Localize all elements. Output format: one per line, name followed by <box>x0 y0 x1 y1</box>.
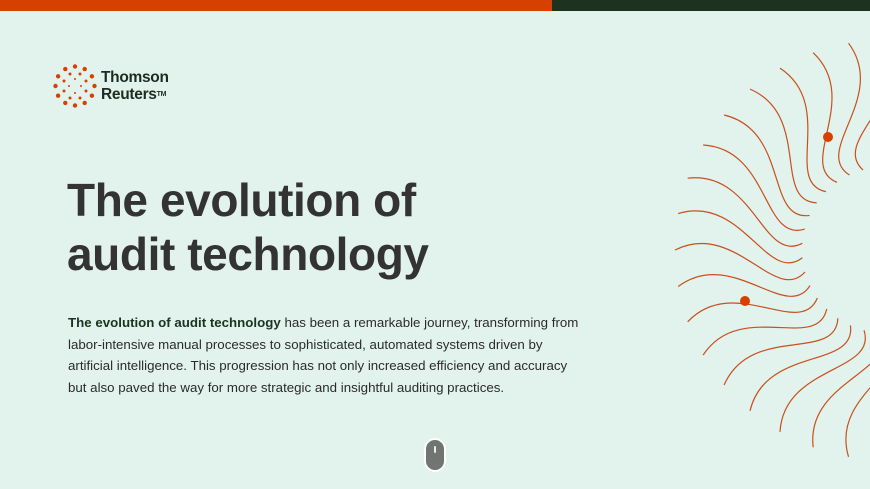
title: audit technology <box>67 228 429 280</box>
logo <box>53 64 169 108</box>
logo text: ReutersTM <box>101 86 166 103</box>
icon: mouse scroll <box>424 438 446 472</box>
title <box>67 174 429 280</box>
intro paragraph: The evolution of audit technology has been a remarkable journey, transforming from labor-intensive manual processes to sophisticated, automated systems driven by artificial intelligence. This progression has not only increased efficiency and accuracy but also paved the way for more strategic and insightful auditing practices. <box>68 315 578 395</box>
logo text: Thomson <box>101 69 169 86</box>
logo text <box>101 69 169 103</box>
title: The evolution of <box>67 174 416 226</box>
icon: dotted circle <box>53 64 97 108</box>
top bar <box>0 0 870 11</box>
